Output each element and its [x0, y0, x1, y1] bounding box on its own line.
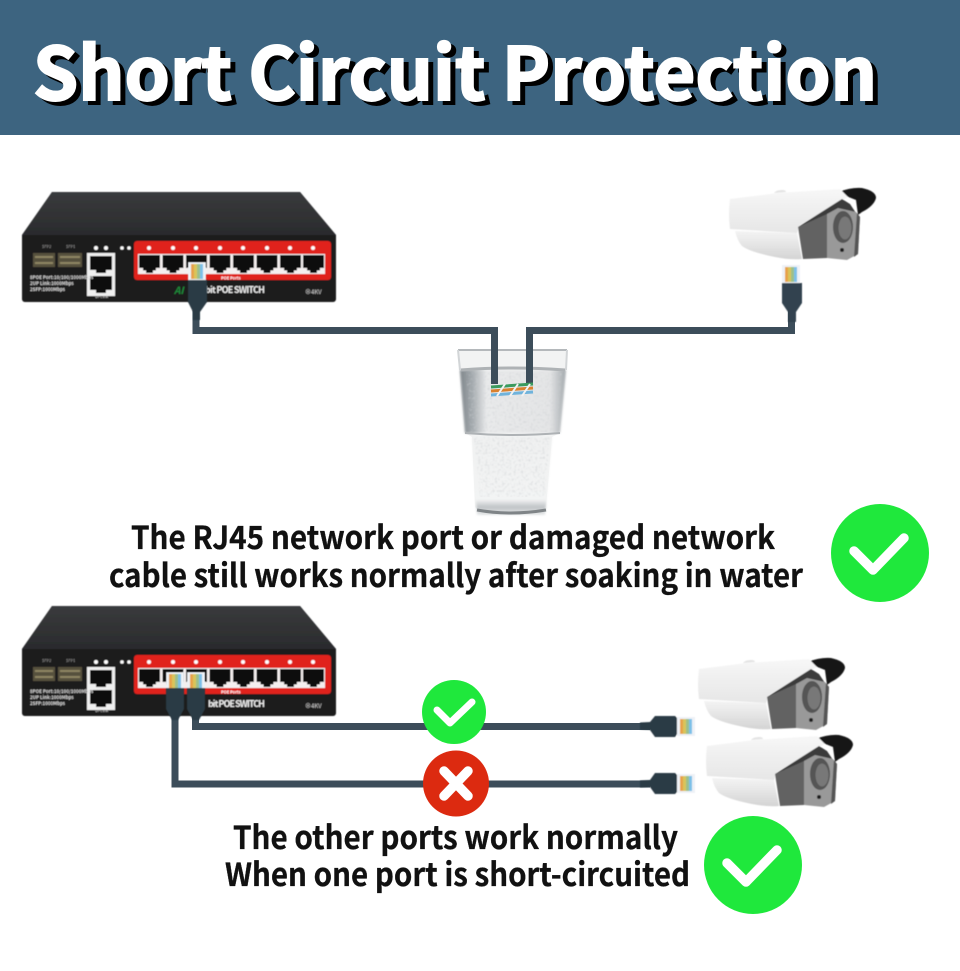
glass of water [458, 327, 567, 515]
camera: top [729, 188, 876, 260]
text: water test caption: The RJ45 network port or damaged network [131, 513, 776, 559]
cable: glass to camera [530, 310, 792, 383]
switch: top PoE switch: UPLink [95, 294, 109, 300]
text: water test caption: cable still works normally after soaking in water [109, 551, 803, 597]
switch: top PoE switch: SFP1 [66, 244, 75, 250]
icon: green check, top [831, 504, 929, 602]
text: port isolation caption: When one port is short-circuited [225, 850, 690, 896]
title banner [0, 0, 960, 135]
cable: switch to glass [196, 310, 494, 383]
switch: bottom PoE switch: 2SFP:1000Mbps [30, 701, 66, 707]
switch: bottom PoE switch: 2UP Link:1000Mbps [30, 694, 74, 701]
switch: bottom PoE switch: POE Ports [221, 689, 241, 695]
switch: top PoE switch [22, 192, 336, 302]
title: Short Circuit Protection [38, 20, 882, 126]
switch: bottom PoE switch: bit POE SWITCH [208, 697, 265, 710]
switch: top PoE switch: AI [173, 282, 185, 297]
switch: top PoE switch: 8POE Port:10/100/1000Mbps [30, 275, 94, 281]
text: water test caption [109, 513, 803, 597]
switch: top PoE switch: 2SFP:1000Mbps [30, 287, 66, 293]
plug: at lower camera [640, 773, 695, 794]
switch: bottom PoE switch: SFP1 [66, 658, 75, 664]
camera: middle [698, 658, 845, 730]
title: Short Circuit Protection [33, 16, 877, 122]
exposed wires [491, 384, 533, 396]
icon: green check, bottom [704, 816, 802, 914]
icon: red cross [423, 750, 489, 816]
text: port isolation caption: The other ports work normally [233, 813, 678, 859]
cable ends in water [494, 327, 530, 384]
camera: lower [706, 735, 853, 807]
text: port isolation caption [225, 813, 690, 896]
switch: bottom PoE switch: 8POE Port:10/100/1000Mbps [30, 689, 94, 695]
plug: at middle camera [640, 716, 695, 737]
switch: top PoE switch: bit POE SWITCH [205, 283, 265, 296]
switch: bottom PoE switch [22, 606, 336, 716]
switch: bottom PoE switch: UPLink [95, 708, 109, 714]
plug: port 7 [166, 672, 184, 720]
switch: top PoE switch: POE Ports [221, 275, 241, 281]
cable: shorted port to camera [175, 715, 650, 784]
switch: top PoE switch: 2UP Link:1000Mbps [30, 280, 74, 287]
plug: on top camera [782, 265, 802, 322]
switch: top PoE switch: SFP2 [42, 244, 52, 250]
switch: bottom PoE switch: SFP2 [42, 658, 52, 664]
icon: small green check [422, 680, 486, 744]
plug: port 6 [187, 672, 205, 720]
plug: on top switch [188, 262, 207, 320]
cable: working port to camera [196, 715, 650, 726]
switch: top PoE switch: ⊗4KV [305, 287, 322, 296]
switch: bottom PoE switch: ⊗4KV [305, 701, 322, 710]
